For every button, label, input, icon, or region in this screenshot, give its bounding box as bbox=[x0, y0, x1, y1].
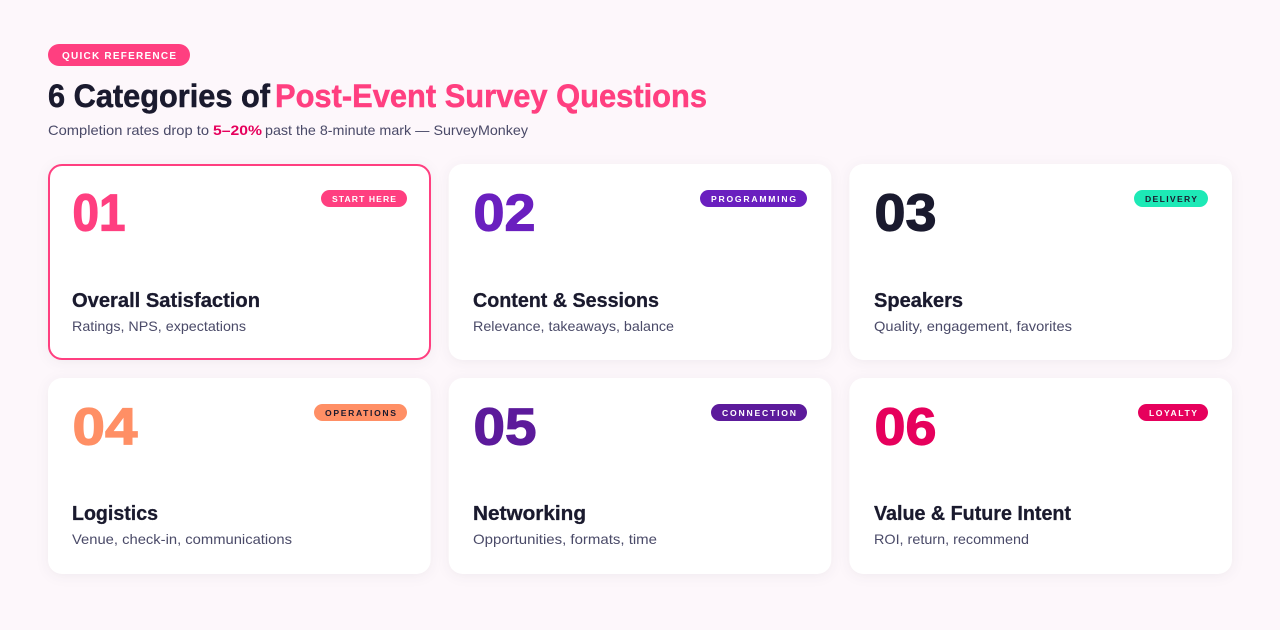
badge: connection: CONNECTION bbox=[722, 408, 796, 418]
panel: card 04 logistics bbox=[48, 378, 431, 574]
badge: connection bbox=[711, 404, 807, 421]
subtitle: Completion rates drop to bbox=[48, 122, 209, 138]
card description: ROI, return, recommend bbox=[874, 531, 1029, 547]
title bbox=[48, 78, 707, 114]
card description: Quality, engagement, favorites bbox=[874, 318, 1072, 334]
card description: Opportunities, formats, time bbox=[473, 531, 657, 547]
number 03: 03 bbox=[874, 184, 936, 242]
header bbox=[48, 44, 707, 138]
badge: quick reference: QUICK REFERENCE bbox=[62, 51, 176, 62]
card heading: Networking bbox=[473, 503, 586, 525]
subtitle bbox=[48, 122, 528, 138]
title: Post-Event Survey Questions bbox=[275, 78, 707, 114]
badge: start here bbox=[321, 190, 407, 207]
badge: programming bbox=[700, 190, 807, 207]
card heading: Speakers bbox=[874, 290, 963, 312]
badge: delivery: DELIVERY bbox=[1145, 194, 1197, 204]
card description: Ratings, NPS, expectations bbox=[72, 318, 246, 334]
card heading: Overall Satisfaction bbox=[72, 290, 260, 312]
panel: card 01 overall satisfaction bbox=[49, 165, 430, 359]
panel: card 02 content and sessions bbox=[449, 164, 831, 360]
card heading: Value & Future Intent bbox=[874, 503, 1071, 525]
badge: delivery bbox=[1134, 190, 1208, 207]
card heading: Content & Sessions bbox=[473, 290, 659, 312]
badge: operations bbox=[314, 404, 407, 421]
title: 6 Categories of bbox=[48, 78, 270, 114]
card description: Relevance, takeaways, balance bbox=[473, 318, 674, 334]
number 05: 05 bbox=[474, 398, 536, 456]
badge: loyalty bbox=[1138, 404, 1208, 421]
number 04: 04 bbox=[72, 398, 138, 456]
badge: quick reference bbox=[48, 44, 190, 66]
badge: start here: START HERE bbox=[332, 194, 396, 204]
panel: card 06 value and future intent bbox=[849, 378, 1232, 574]
number 01: 01 bbox=[72, 184, 126, 242]
badge: loyalty: LOYALTY bbox=[1149, 408, 1197, 418]
number 06: 06 bbox=[874, 398, 936, 456]
panel: card 03 speakers bbox=[849, 164, 1232, 360]
card heading: Logistics bbox=[72, 503, 158, 525]
card description: Venue, check-in, communications bbox=[72, 531, 292, 547]
number 02: 02 bbox=[474, 184, 536, 242]
panel: card 05 networking bbox=[449, 378, 831, 574]
badge: operations: OPERATIONS bbox=[325, 408, 396, 418]
badge: programming: PROGRAMMING bbox=[711, 194, 796, 204]
subtitle: past the 8-minute mark — SurveyMonkey bbox=[265, 122, 528, 138]
subtitle: 5–20% bbox=[213, 122, 263, 138]
